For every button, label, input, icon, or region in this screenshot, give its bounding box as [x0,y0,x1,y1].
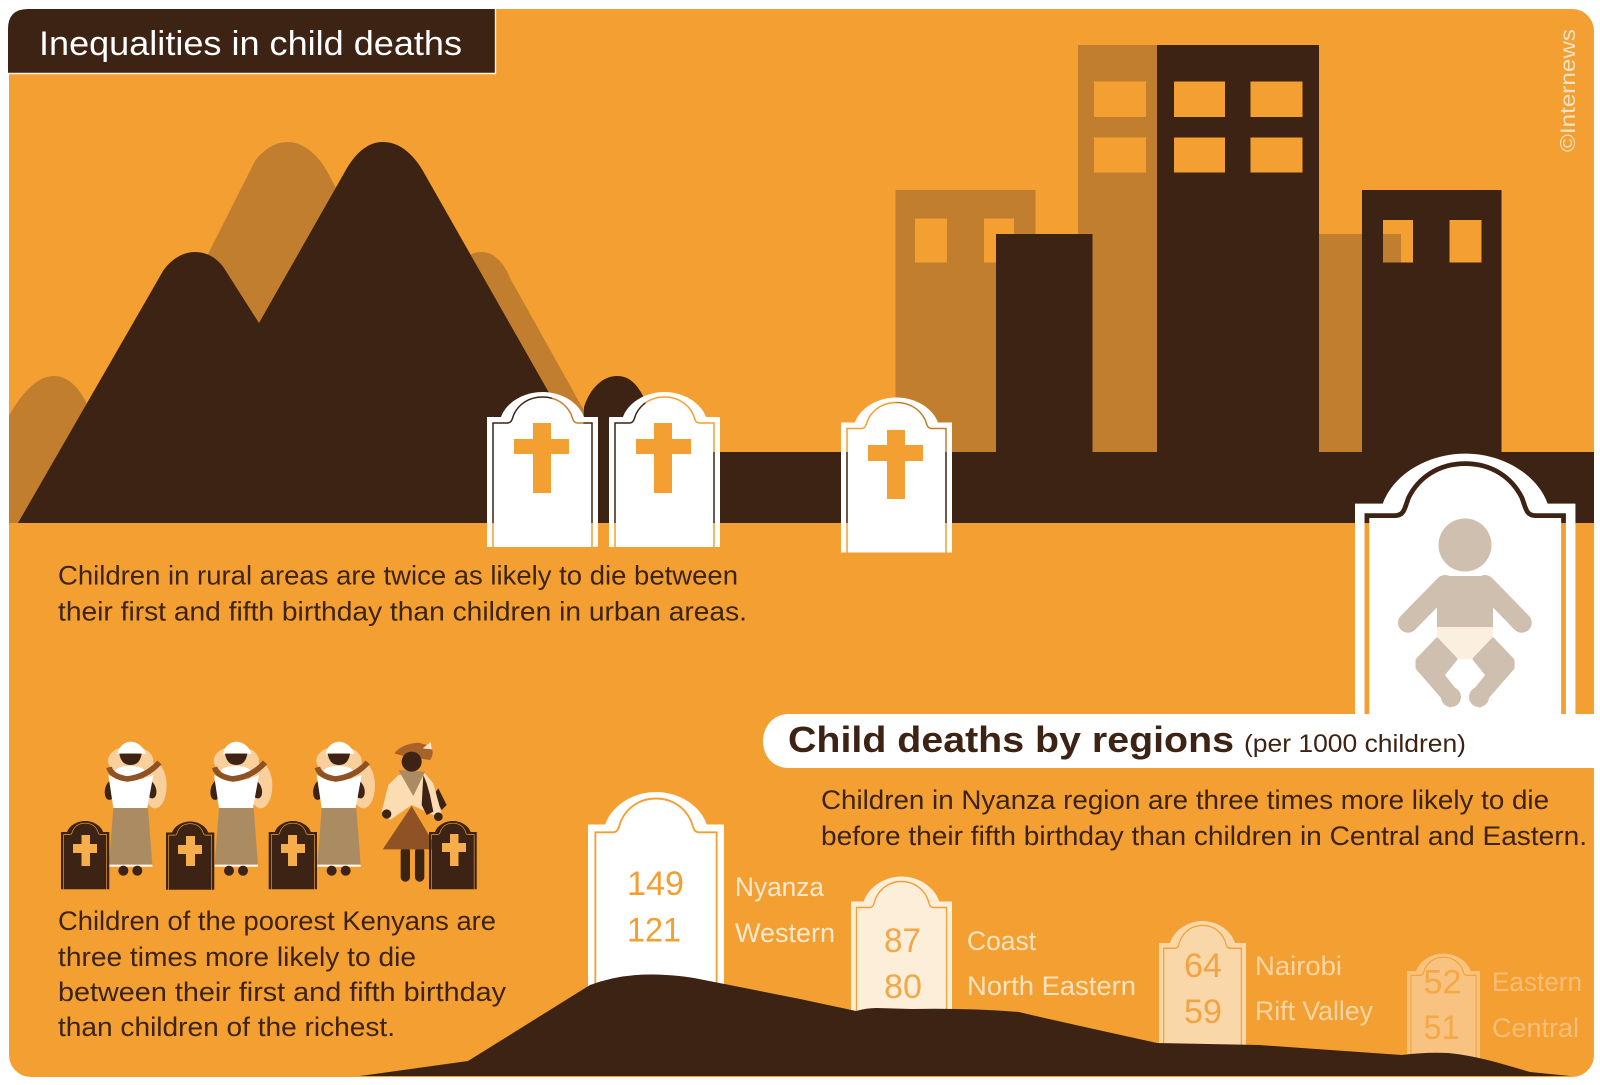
gravestone: Nairobi and Rift Valley: Nairobi [1255,951,1342,981]
section heading: child deaths by regions: (per 1000 children) [1244,730,1466,758]
background buildings [896,45,1401,452]
background building windows [915,82,1146,262]
icon: gravestone rural 1 [487,392,598,547]
gravestone: Coast and North Eastern: 80 [884,968,922,1006]
illustration: ground strip [598,452,1594,523]
gravestone: Nyanza and Western: Western [735,918,835,948]
gravestone: Nyanza and Western: Nyanza [735,872,825,902]
illustration: poor and rich mourners with gravestones [103,742,447,882]
icon: gravestone urban [841,398,952,552]
gravestone: Eastern and Central: 51 [1424,1009,1460,1047]
icon: small gravestone 4 [429,821,477,889]
figure: wealthier person [382,742,447,882]
text: Nyanza comparison: Children in Nyanza region are three times more likely to die [821,785,1549,815]
text: poorest vs richest: Children of the poorest Kenyans are [58,906,496,936]
text: rural vs urban: Children in rural areas are twice as likely to die between [58,560,738,590]
gravestone: Coast and North Eastern [851,876,1136,1032]
gravestone: Nairobi and Rift Valley: Rift Valley [1255,996,1373,1026]
gravestone: Nairobi and Rift Valley: 64 [1184,947,1222,985]
icon: small gravestone 3 [269,821,317,889]
gravestone: Eastern and Central: Central [1492,1013,1579,1043]
title text: Inequalities in child deaths [39,25,462,63]
section heading: child deaths by regions: Child deaths by regions [788,719,1234,760]
icon: baby [1408,518,1522,707]
text: rural vs urban [58,560,747,626]
foreground building windows [1174,82,1482,262]
illustration: rural mountains [18,142,660,523]
figure: poor woman 1 [103,742,167,876]
text: rural vs urban: their first and fifth birthday than children in urban areas. [58,596,747,626]
figure: poor woman 3 [311,742,375,876]
illustration: foreground hill [360,974,1570,1076]
icon: small gravestone 1 [61,821,109,889]
text: Nyanza comparison: before their fifth birthday than children in Central and Eastern. [821,821,1587,851]
icon: gravestone rural 2 [609,392,720,547]
gravestone: Nairobi and Rift Valley [1159,921,1373,1057]
text: poorest vs richest: three times more likely to die [58,942,416,972]
gravestone: Coast and North Eastern: Coast [967,926,1036,956]
text: poorest vs richest: between their first and fifth birthday [58,977,507,1007]
text: Nyanza comparison [821,785,1587,851]
gravestone: Eastern and Central [1407,954,1582,1062]
title bar [8,9,496,74]
gravestone: Nyanza and Western [588,792,835,994]
gravestone: Coast and North Eastern: North Eastern [967,971,1136,1001]
text: poorest vs richest [58,906,507,1042]
copyright credit: ©Internews [1557,29,1580,152]
icon: small gravestone 2 [166,822,214,890]
figure: poor woman 2 [209,742,272,876]
text: poorest vs richest: than children of the richest. [58,1012,395,1042]
gravestone: Nyanza and Western: 121 [627,912,681,950]
section heading: child deaths by regions [763,714,1600,768]
illustration: background mountains [9,142,592,523]
foreground buildings [996,45,1502,454]
gravestone: Eastern and Central: 52 [1424,964,1462,1002]
gravestone: Coast and North Eastern: 87 [884,922,921,960]
illustration: city buildings [896,45,1502,454]
gravestone: Nairobi and Rift Valley: 59 [1184,993,1222,1031]
gravestone: Nyanza and Western: 149 [627,865,684,903]
gravestone: Eastern and Central: Eastern [1492,967,1582,997]
icon: large gravestone with baby [1355,454,1576,714]
